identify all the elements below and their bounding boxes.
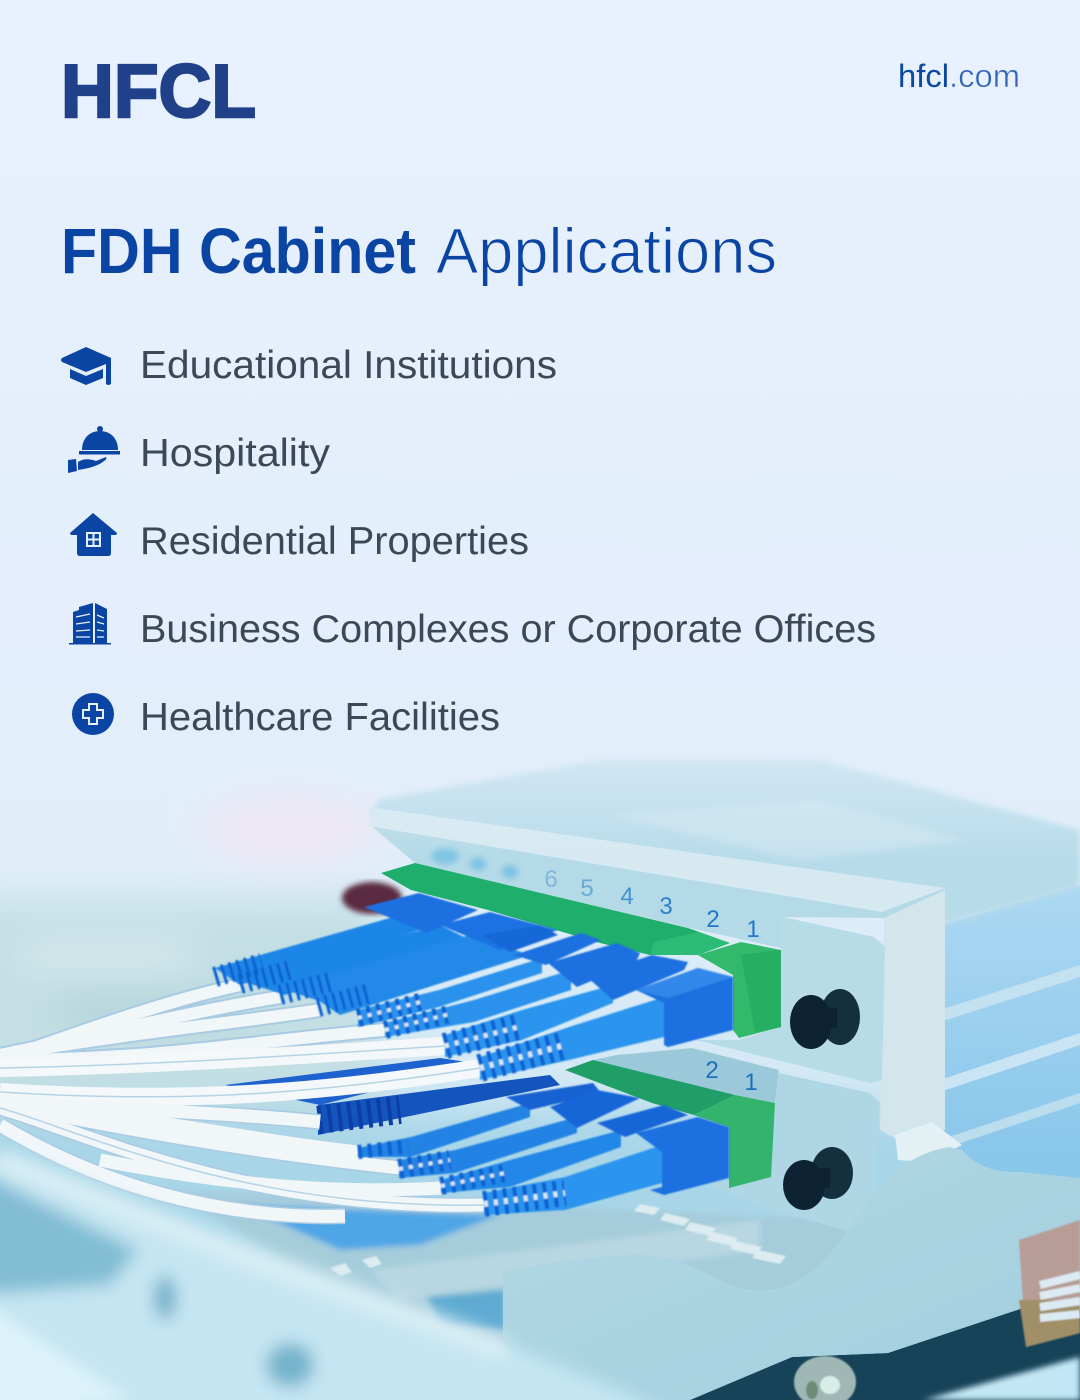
item: educational institutions: Educational Institutions	[140, 344, 557, 387]
icon: office building	[69, 603, 111, 644]
connector 4	[358, 958, 542, 1027]
logo: HFCL: HFCL	[61, 49, 256, 133]
icon: house	[70, 513, 117, 556]
top module face strip with port numbers: 3	[659, 893, 673, 920]
connector 3	[385, 970, 571, 1037]
bottom module	[565, 1048, 880, 1237]
floor teeth	[330, 1204, 786, 1276]
title: Applications	[436, 215, 777, 287]
connector 2	[445, 985, 613, 1057]
connector 2 lower	[441, 1130, 621, 1193]
top module front panel	[696, 917, 885, 1083]
right cabinet side panels	[940, 885, 1080, 1260]
item: hospitality: Hospitality	[140, 432, 331, 475]
item: residential properties: Residential Properties	[140, 520, 529, 563]
top module face strip with port numbers: 4	[620, 883, 634, 910]
website url: hfcl.com	[898, 58, 1020, 94]
green adapter row top	[381, 863, 781, 1038]
screw head	[794, 1356, 856, 1400]
icon: medical cross	[72, 693, 114, 735]
blurred backdrop left	[0, 791, 1080, 1400]
dark plug behind	[342, 882, 402, 914]
top connector group	[215, 893, 733, 1080]
dark area lower right	[690, 1307, 1080, 1400]
top fade of photo into page background	[0, 690, 1080, 860]
connector 3 lower	[399, 1117, 577, 1178]
wire connector at right edge	[1019, 1220, 1080, 1347]
top module face strip with port numbers: 5	[580, 875, 594, 902]
item: hospitality	[68, 426, 331, 475]
title: FDH Cabinet	[61, 215, 416, 287]
top knob	[790, 989, 860, 1049]
white vertical post	[880, 890, 945, 1140]
floor under the cabinet	[170, 1190, 860, 1350]
title	[61, 215, 777, 287]
bottom module: 2	[705, 1057, 719, 1084]
back connectors	[215, 915, 420, 985]
bottom connector group	[358, 1083, 729, 1215]
photo: fibre optic cabinet with blue connectors	[0, 690, 1080, 1400]
connector 1	[480, 997, 664, 1080]
dark blue back row and shadow lower	[225, 1058, 560, 1135]
connector 4 lower	[358, 1103, 530, 1157]
bottom module: 1	[744, 1069, 758, 1096]
top module face strip with port numbers: 2	[706, 906, 720, 933]
application list	[61, 344, 876, 739]
top module face strip with port numbers	[368, 808, 945, 948]
item: healthcare facilities: Healthcare Facilities	[140, 696, 500, 739]
top module face strip with port numbers: 6	[544, 866, 558, 893]
connector 1 lower	[484, 1145, 662, 1215]
top module face strip with port numbers: 1	[746, 916, 760, 943]
icon: cloche on hand	[68, 426, 120, 473]
item: business complexes: Business Complexes or Corporate Offices	[140, 608, 876, 651]
bottom right pale foot	[923, 1357, 1080, 1400]
cabinet lid	[370, 760, 1080, 925]
blurred foreground tray	[0, 1148, 690, 1400]
white fibre bundle	[0, 985, 484, 1216]
white clip on shell	[895, 1122, 962, 1162]
icon: graduation cap	[61, 347, 111, 385]
grey-green moulded shell	[503, 1147, 1080, 1400]
